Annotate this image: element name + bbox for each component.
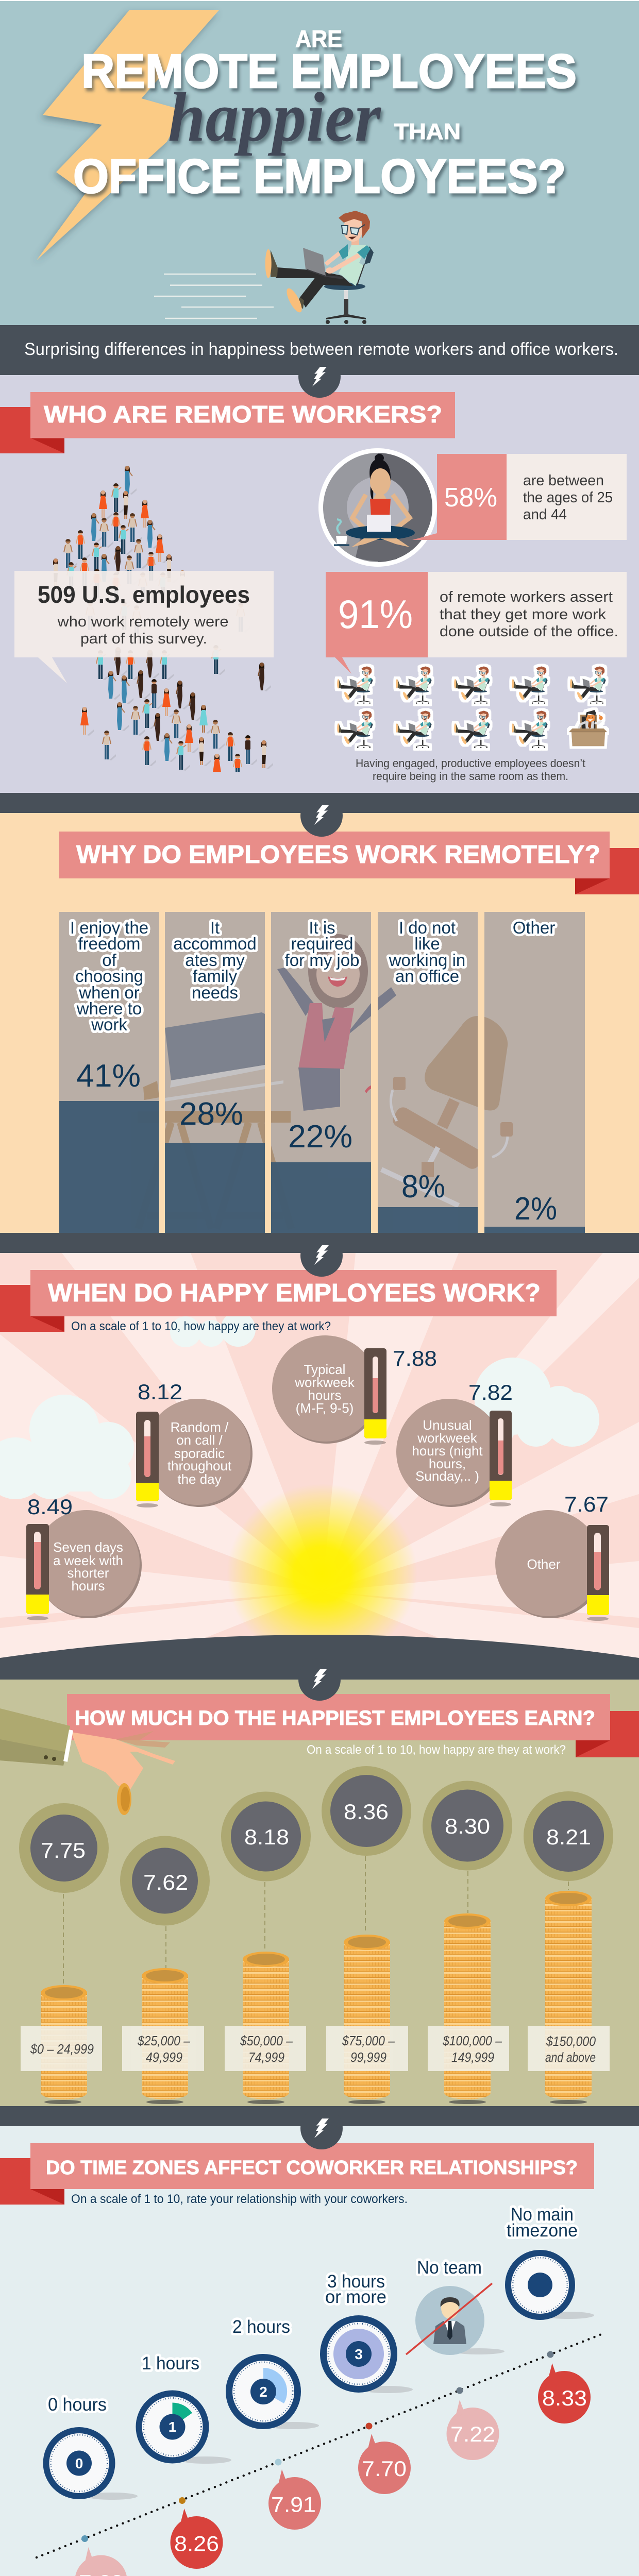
stat: 91 percent: done outside of the office. (440, 623, 618, 640)
bar 4 labels: I do not (399, 918, 456, 937)
clock: 0 hours: 0 (75, 2455, 83, 2471)
item: unusual workweek: Sunday,.. ) (415, 1468, 479, 1484)
clock: 0 hours (43, 2395, 138, 2500)
bar 3 labels: required (291, 934, 354, 953)
bubble: 8.21: 8.21 (546, 1825, 591, 1849)
icon: no team: No team (417, 2258, 482, 2278)
dotted trend line (37, 2333, 605, 2557)
subtitle: On a scale of 1 to 10, how happy are they at work? (71, 1319, 331, 1333)
heading: WHO ARE REMOTE WORKERS? (44, 401, 442, 428)
bar 1 labels: of (102, 951, 117, 970)
item: random: 8.12 (138, 1380, 182, 1404)
salary labels: $25,000 – (137, 2033, 190, 2048)
separator 4 (298, 1658, 341, 1701)
panel: how much do the happiest employees earn (0, 1680, 639, 2106)
item: random: throughout (167, 1458, 232, 1473)
item: seven days (26, 1495, 142, 1620)
bubble: 8.30 (423, 1781, 512, 1870)
item: other: Other (527, 1556, 561, 1572)
rating bubble: 7.91: 7.91 (271, 2493, 316, 2516)
bar 5 labels: 2% (514, 1191, 557, 1227)
ribbon (0, 2158, 64, 2205)
separator 5 (0, 2106, 639, 2149)
item: seven days: 8.49 (27, 1495, 73, 1519)
bubble: 8.30: 8.30 (445, 1814, 490, 1838)
bubble: 7.62: 7.62 (143, 1870, 188, 1894)
bar 1 labels: freedom (78, 934, 141, 953)
bar 3 labels: 22% (288, 1119, 352, 1155)
stat: 58 percent: 58% (444, 483, 497, 513)
salary labels: $50,000 – (240, 2033, 293, 2048)
bubble: 7.75 (19, 1803, 109, 1893)
rating bubble: 7.70 (358, 2434, 411, 2494)
bar 2 labels: needs (192, 983, 238, 1002)
bar 2 labels (173, 918, 257, 1132)
bubble: 8.18: 8.18 (244, 1825, 289, 1849)
item: typical workweek: 7.88 (393, 1346, 437, 1370)
salary labels (21, 2026, 610, 2071)
item: other (495, 1492, 609, 1621)
rating bubble: 8.33: 8.33 (542, 2386, 587, 2410)
bar 1 labels: 41% (76, 1058, 141, 1094)
item: typical workweek: (M-F, 9-5) (296, 1400, 354, 1416)
illustration: hand dropping coin (0, 1708, 175, 1815)
bar 1 labels (70, 918, 148, 1094)
bar 2 labels: accommod (173, 934, 257, 953)
callout: survey size: who work remotely were (57, 614, 228, 630)
bar 1 labels: where to (76, 999, 142, 1018)
clock: 2 hours: 2 hours (232, 2317, 290, 2337)
salary labels: 149,999 (451, 2049, 494, 2065)
hill (0, 1635, 639, 1680)
clock: 3 hours or more (320, 2272, 413, 2393)
ribbon (0, 1285, 64, 1332)
salary labels: 99,999 (350, 2049, 386, 2065)
salary labels: 49,999 (146, 2049, 182, 2065)
bar 5 labels: Other (513, 918, 555, 937)
bar 4 labels: like (414, 934, 440, 953)
caption: Having engaged, productive employees doesn’t (356, 757, 585, 770)
heading (30, 2143, 594, 2189)
heading (30, 1270, 557, 1316)
stat: 58 percent: and 44 (523, 506, 567, 523)
heading (59, 832, 610, 878)
icon array: 9 of 10 remote workers (337, 666, 607, 748)
bar 4 labels: working in (389, 951, 465, 970)
item: typical workweek: workweek (294, 1375, 355, 1390)
stat: 58 percent: are between (523, 472, 604, 489)
bubble: 8.18 (221, 1792, 311, 1882)
clock: no main timezone: timezone (507, 2221, 578, 2241)
heading: DO TIME ZONES AFFECT COWORKER RELATIONSHIPS? (46, 2157, 578, 2179)
bubble: 7.62 (120, 1836, 210, 1926)
bar 2 labels: 28% (179, 1096, 243, 1132)
heading: WHEN DO HAPPY EMPLOYEES WORK? (48, 1279, 541, 1307)
illustration: remote worker on chair (265, 211, 374, 324)
subtitle: On a scale of 1 to 10, rate your relationship with your coworkers. (71, 2192, 408, 2206)
clock: 2 hours (226, 2317, 319, 2429)
bar 3 labels: for my job (285, 951, 359, 970)
bar 3 labels (285, 918, 359, 1155)
salary labels: $100,000 – (442, 2033, 502, 2048)
title: THAN (394, 119, 461, 144)
title (73, 25, 577, 203)
bar 2 labels: It (210, 918, 220, 937)
separator: subtitle band (0, 325, 639, 398)
icon: no team (406, 2258, 505, 2355)
title: happier (168, 78, 382, 156)
item: unusual workweek: hours, (429, 1456, 466, 1471)
speed lines (154, 274, 274, 318)
clock: 1 hours: 1 (169, 2419, 176, 2435)
item: seven days: Seven days (53, 1539, 123, 1555)
item: unusual workweek (396, 1380, 513, 1507)
salary labels: $0 – 24,999 (30, 2041, 94, 2057)
bar chart: reasons (59, 1101, 585, 1233)
title: REMOTE EMPLOYEES (81, 44, 577, 98)
item: seven days: hours (71, 1578, 105, 1594)
bar 2 labels: family (193, 967, 238, 986)
bar 1 labels: when or (78, 983, 140, 1002)
panel: when do happy employees work (0, 1253, 639, 1680)
item: unusual workweek: hours (night (412, 1443, 483, 1459)
item: random: the day (177, 1471, 222, 1487)
caption (356, 757, 585, 783)
heading (30, 392, 455, 438)
item: seven days: shorter (68, 1565, 109, 1581)
panel: hero (0, 1, 639, 325)
clock: 3 hours or more: 3 (355, 2346, 363, 2362)
callout: survey size (14, 571, 274, 683)
bar 4 labels (389, 918, 465, 1205)
heading: WHY DO EMPLOYEES WORK REMOTELY? (76, 841, 600, 869)
bar 4 labels: an office (395, 967, 459, 986)
separator 3 (0, 1233, 639, 1277)
item: typical workweek (272, 1335, 437, 1445)
lightning bolt graphic (37, 10, 220, 260)
bubble: 8.21 (524, 1791, 613, 1881)
bar 2 labels: ates my (185, 951, 245, 970)
title: OFFICE EMPLOYEES? (73, 149, 566, 203)
stat: 91 percent (326, 572, 627, 674)
salary labels: $75,000 – (342, 2033, 395, 2048)
ribbon (575, 848, 639, 894)
clouds (0, 1312, 599, 1499)
item: other: 7.67 (564, 1492, 609, 1516)
separator 2 (0, 793, 639, 837)
rating bubble: 7.22 (446, 2400, 499, 2460)
bar 5 labels (513, 918, 557, 1227)
coin stacks (41, 1891, 592, 2104)
bar 1 labels: work (91, 1015, 127, 1034)
rating bubble: 8.33 (538, 2363, 591, 2424)
stat: 91 percent: 91% (338, 591, 413, 637)
icon: woman with laptop in circle (318, 448, 437, 567)
salary labels: and above (545, 2049, 596, 2065)
clock: 0 hours: 0 hours (48, 2395, 107, 2415)
bubble: 8.36: 8.36 (344, 1800, 389, 1824)
faded desk, woman and chair illustration (138, 934, 513, 1229)
crowd of employees (53, 466, 273, 784)
clock: 2 hours: 2 (259, 2384, 267, 2400)
rating bubble: 7.70: 7.70 (362, 2456, 407, 2481)
bar 3 labels: It is (309, 918, 335, 937)
stat: 91 percent: that they get more work (440, 606, 607, 623)
rating bubble: 7.91 (268, 2469, 321, 2530)
title: ARE (295, 25, 342, 52)
item: seven days: a week with (53, 1553, 123, 1568)
subtitle: On a scale of 1 to 10, how happy are they at work? (307, 1743, 566, 1757)
ribbon (0, 407, 64, 453)
sun (227, 1484, 417, 1664)
rating bubble: 7.22: 7.22 (450, 2422, 495, 2446)
item: random: on call / (176, 1432, 223, 1448)
stat: 58 percent (412, 454, 627, 540)
rating bubble: 7.69 (75, 2547, 127, 2576)
panel: who are remote workers (0, 375, 639, 793)
bar 1 labels: I enjoy the (70, 918, 148, 937)
rating bubble: 8.26: 8.26 (174, 2532, 219, 2555)
salary labels: $150,000 (546, 2033, 596, 2049)
item: typical workweek: Typical (304, 1362, 345, 1377)
item: unusual workweek: 7.82 (468, 1380, 513, 1404)
bar 4 labels: 8% (401, 1169, 445, 1205)
callout: survey size: part of this survey. (80, 631, 207, 647)
heading: HOW MUCH DO THE HAPPIEST EMPLOYEES EARN? (75, 1707, 595, 1730)
column backgrounds (59, 912, 585, 1233)
heading (67, 1694, 610, 1740)
bar 1 labels: choosing (75, 967, 143, 986)
item: unusual workweek: workweek (417, 1430, 478, 1446)
bubble: 7.75: 7.75 (41, 1838, 86, 1862)
clock: 1 hours (136, 2353, 231, 2464)
item: random (136, 1380, 253, 1507)
ribbon (576, 1711, 639, 1757)
separator: subtitle band: Surprising differences in happiness between remote workers and office workers. (24, 340, 618, 359)
item: typical workweek: hours (308, 1387, 342, 1403)
salary labels: 74,999 (248, 2049, 284, 2065)
clock: no main timezone: No main (511, 2205, 574, 2225)
caption: require being in the same room as them. (373, 770, 568, 783)
item: random: Random / (171, 1419, 229, 1435)
rating bubble: 8.26 (170, 2509, 223, 2569)
item: random: sporadic (174, 1446, 225, 1461)
stat: 91 percent: of remote workers assert (440, 589, 613, 605)
stat: 58 percent: the ages of 25 (523, 489, 613, 506)
panel: why do employees work remotely (0, 813, 639, 1233)
panel: do time zones affect coworker relationships (0, 2126, 639, 2576)
clock: 1 hours: 1 hours (142, 2353, 199, 2374)
clock: 3 hours or more: 3 hours (327, 2272, 385, 2292)
item: unusual workweek: Unusual (423, 1417, 472, 1433)
clock: 3 hours or more: or more (325, 2287, 386, 2307)
bubble: 8.36 (322, 1766, 411, 1856)
callout: survey size: 509 U.S. employees (38, 581, 250, 608)
clock: no main timezone (505, 2205, 594, 2320)
